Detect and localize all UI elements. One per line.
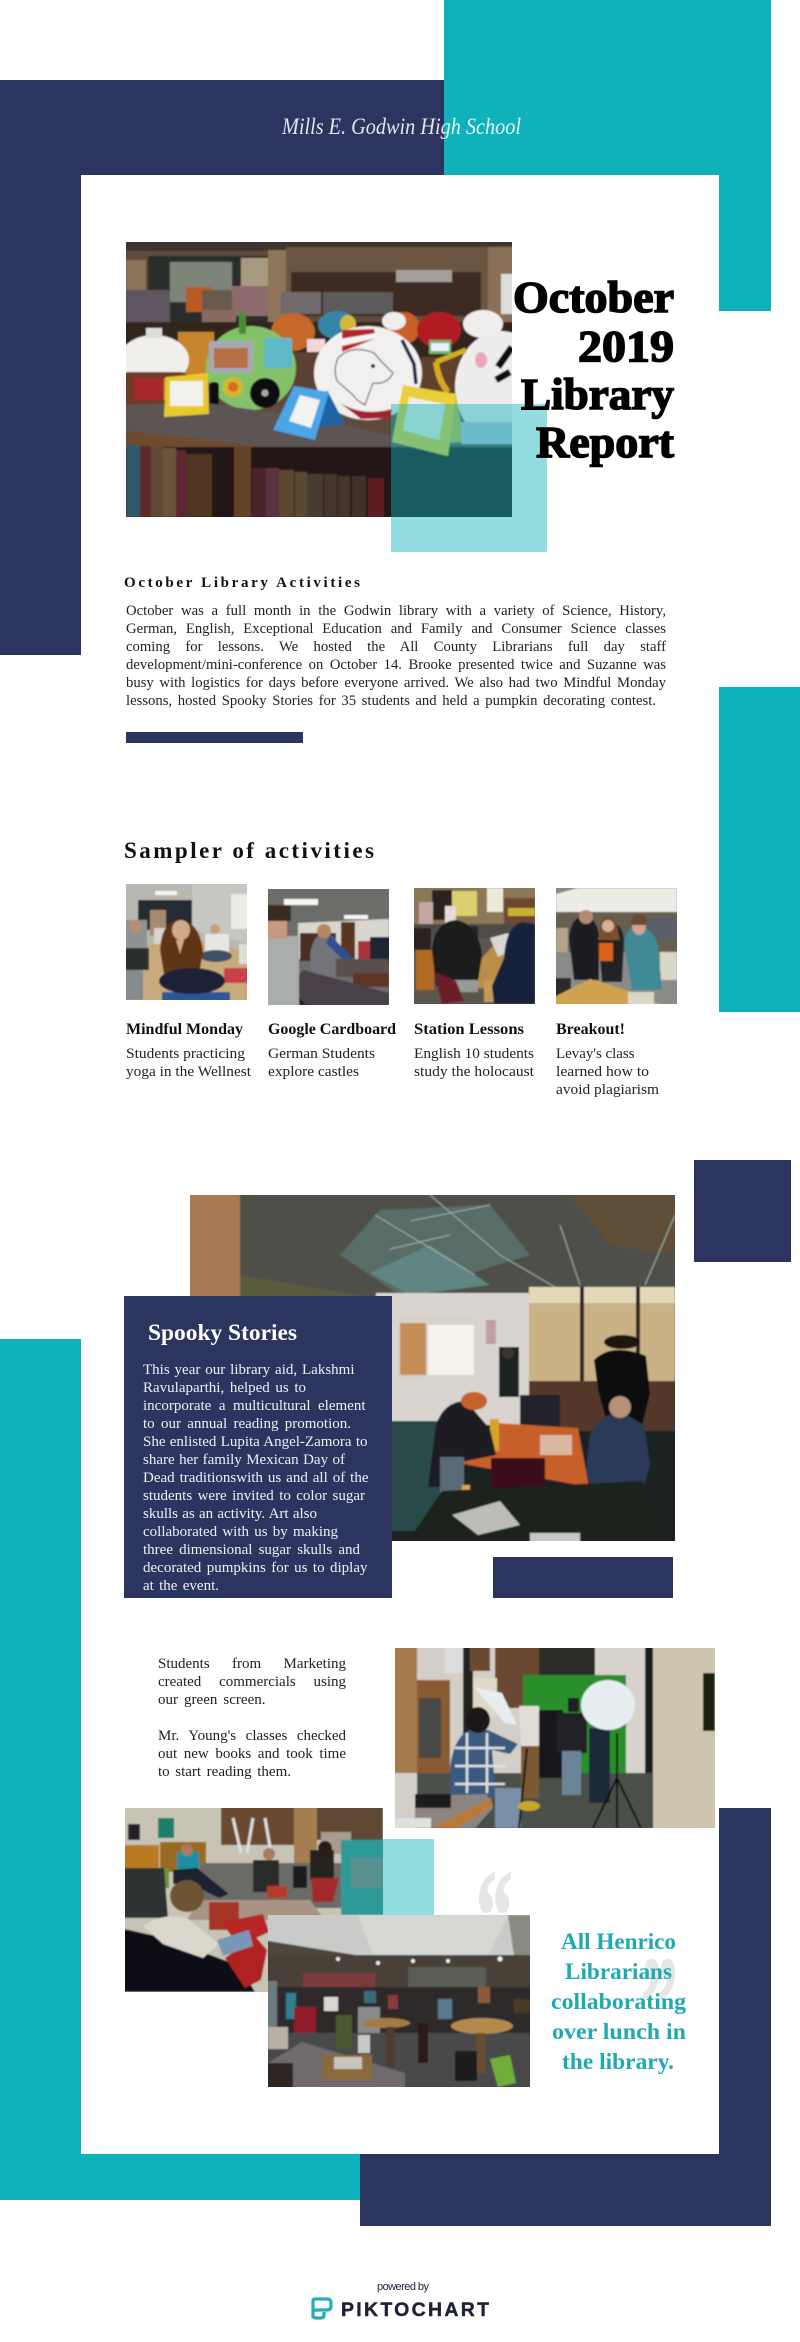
text block: Spooky Stories body: She enlisted Lupita Angel-Zamora to xyxy=(143,1434,368,1450)
pull quote: collaborating xyxy=(551,1989,686,2015)
caption: Google Cardboard: Google Cardboard xyxy=(268,1021,396,1038)
text block: marketing and book checkout notes: Mr. Young's classes checked xyxy=(158,1728,346,1744)
caption: Breakout!: avoid plagiarism xyxy=(556,1082,660,1098)
caption: Google Cardboard: explore castles xyxy=(268,1064,359,1080)
right pumpkin xyxy=(455,331,547,443)
caption: Mindful Monday: yoga in the Wellnest xyxy=(126,1064,251,1080)
heading: Sampler of activities: Sampler of activities xyxy=(124,838,374,863)
text block: marketing and book checkout notes: out new books and took time xyxy=(158,1746,346,1762)
photo: Spooky Stories event xyxy=(190,1195,675,1541)
text block: Spooky Stories body xyxy=(143,1362,368,1594)
text block: Spooky Stories body: Ravulaparthi, helped us to xyxy=(143,1380,306,1396)
text block: Spooky Stories body: skulls as an activity. Art also xyxy=(143,1506,317,1522)
left pumpkin xyxy=(119,335,189,385)
text block: October activities summary: busy with logistics for days before everyone arrived. We also had two Mindful Monday xyxy=(126,675,666,691)
translucent teal square xyxy=(391,404,547,552)
text block: marketing and book checkout notes xyxy=(158,1656,346,1780)
caption: Google Cardboard: German Students xyxy=(268,1046,375,1062)
navy accent bar xyxy=(126,732,303,743)
pull quote: the library. xyxy=(562,2049,674,2075)
text block: Spooky Stories body: students were invited to color sugar xyxy=(143,1488,365,1504)
panel: Spooky Stories xyxy=(124,1296,392,1598)
caption: Station Lessons: study the holocaust xyxy=(414,1064,534,1080)
text block: Spooky Stories body: Dead traditionswith us and all of the xyxy=(143,1470,368,1486)
text block: October activities summary: October was a full month in the Godwin library with a variety of Science, History, xyxy=(126,603,666,619)
text block: Spooky Stories body: at the event. xyxy=(143,1578,219,1594)
counter and shelf xyxy=(121,402,516,480)
heading: Spooky Stories: Spooky Stories xyxy=(148,1320,297,1346)
photo: Google Cardboard students xyxy=(268,889,389,1005)
green van pumpkin xyxy=(206,326,296,410)
caption: Breakout!: learned how to xyxy=(556,1064,649,1080)
school name: Mills E. Godwin High School xyxy=(281,114,521,139)
photo: green screen commercials xyxy=(395,1648,715,1828)
caption: Station Lessons: Station Lessons xyxy=(414,1021,524,1038)
text block: marketing and book checkout notes: to start reading them. xyxy=(158,1764,291,1780)
caption: Breakout! xyxy=(556,1021,660,1098)
text block: October activities summary xyxy=(126,603,666,709)
translucent teal square behind photos xyxy=(383,1839,434,1915)
report title: Library xyxy=(521,370,674,419)
text block: Spooky Stories body: This year our library aid, Lakshmi xyxy=(143,1362,354,1378)
report title: 2019 xyxy=(578,322,674,371)
text block: Spooky Stories body: to our annual reading promotion. xyxy=(143,1416,351,1432)
caption: Station Lessons: English 10 students xyxy=(414,1046,534,1062)
text block: Spooky Stories body: three dimensional sugar skulls and xyxy=(143,1542,360,1558)
big white pumpkin xyxy=(314,326,422,420)
text block: Spooky Stories body: incorporate a multicultural element xyxy=(143,1398,366,1414)
icon: Piktochart logo xyxy=(313,2299,331,2318)
photo: librarians at lunch xyxy=(268,1915,530,2087)
text block: Spooky Stories body: collaborated with us by making xyxy=(143,1524,338,1540)
footer: powered by Piktochart xyxy=(313,2281,489,2321)
footer: powered by Piktochart: PIKTOCHART xyxy=(341,2299,489,2321)
text block: October activities summary: lessons, hosted Spooky Stories for 35 students and held a pumpkin decorating contest. xyxy=(126,693,656,709)
text block: marketing and book checkout notes: Students from Marketing xyxy=(158,1656,346,1672)
pull quote: Librarians xyxy=(565,1959,672,1985)
text block: October activities summary: coming for lessons. We hosted the All County Librarians full day staff xyxy=(126,639,666,655)
photo: station lessons xyxy=(414,888,535,1004)
text block: marketing and book checkout notes: our green screen. xyxy=(158,1692,266,1708)
report title: October xyxy=(513,273,674,322)
text block: Spooky Stories body: decorated pumpkins for us to diplay xyxy=(143,1560,368,1576)
heading: October Library Activities: October Library Activities xyxy=(124,575,360,591)
text block: October activities summary: German, English, Exceptional Education and Family and Consumer Science classes xyxy=(126,621,666,637)
photo: Breakout group xyxy=(556,888,677,1004)
report title: Report xyxy=(536,418,674,467)
caption: Breakout!: Levay's class xyxy=(556,1046,635,1062)
pull quote: All Henrico xyxy=(561,1929,676,1955)
back pumpkins xyxy=(271,313,315,351)
text block: Spooky Stories body: share her family Mexican Day of xyxy=(143,1452,345,1468)
quotation mark: opening: “ xyxy=(476,1843,513,1987)
caption: Breakout!: Breakout! xyxy=(556,1021,625,1038)
photo: yoga session xyxy=(126,884,247,1000)
pull quote xyxy=(551,1929,686,2075)
text block: marketing and book checkout notes: created commercials using xyxy=(158,1674,346,1690)
navy bar under event photo xyxy=(493,1557,673,1598)
caption: Station Lessons xyxy=(414,1021,534,1080)
cards xyxy=(164,373,209,417)
pull quote: over lunch in xyxy=(552,2019,686,2045)
caption: Mindful Monday: Students practicing xyxy=(126,1046,245,1062)
quotation mark: closing: ” xyxy=(641,1930,678,2074)
text block: October activities summary: development/mini-conference on October 14. Brooke presented twice and Suzanne was xyxy=(126,657,666,673)
activity captions xyxy=(126,1021,660,1098)
report title xyxy=(513,273,674,467)
footer: powered by Piktochart: powered by xyxy=(377,2281,430,2293)
caption: Mindful Monday: Mindful Monday xyxy=(126,1021,243,1038)
caption: Mindful Monday xyxy=(126,1021,251,1080)
photo: decorated pumpkins xyxy=(126,242,512,517)
caption: Google Cardboard xyxy=(268,1021,396,1080)
photo: students reading in library xyxy=(125,1808,383,1992)
